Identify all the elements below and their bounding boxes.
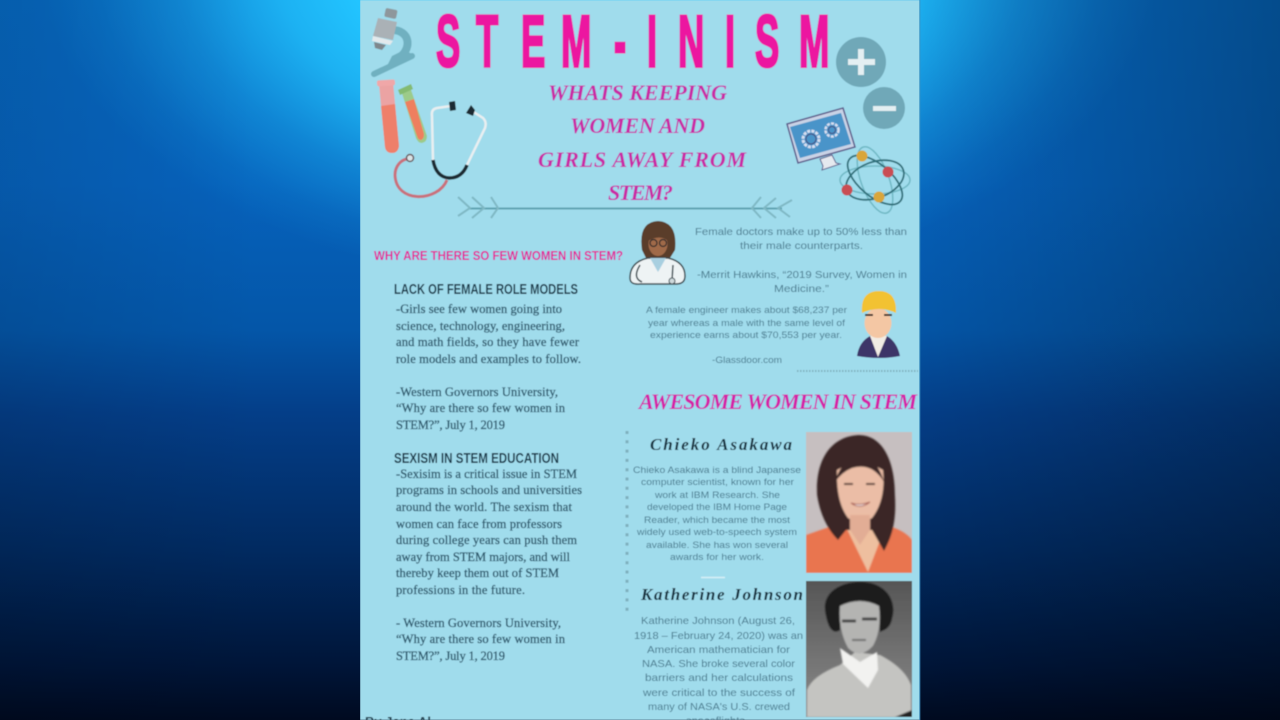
text: katherine bio: Katherine Johnson (August 26, [641,615,795,627]
text: katherine bio: NASA. She broke several color [642,658,796,670]
text: female doctors statistic: -Merrit Hawkins, “2019 Survey, Women in [697,269,907,281]
poster panel [360,0,920,720]
text: chieko bio: computer scientist, known for her [641,477,794,487]
text: chieko bio: Chieko Asakawa is a blind Japanese [633,465,801,475]
text: sexism body: STEM?”, July 1, 2019 [396,649,505,663]
subtitle: STEM? [608,180,673,205]
text: sexism body: -Sexisim is a critical issue in STEM [396,467,577,481]
text: sexism body: professions in the future. [396,583,525,597]
title: STEM-INISM [436,2,829,83]
text: sexism body: women can face from professors [396,517,562,531]
heading: sexism in stem education: SEXISM IN STEM EDUCATION [394,451,559,467]
text: katherine bio: barriers and her calculations [645,672,793,684]
text: role models body: science, technology, engineering, [396,319,565,333]
text: chieko bio: work at IBM Research. She [654,490,780,500]
text: sexism body: thereby keep them out of STEM [396,566,559,580]
text: katherine bio: many of NASA's U.S. crewed [648,701,790,713]
text: female doctors statistic [695,226,907,295]
text: role models body: -Girls see few women going into [396,302,562,316]
left column: sexism in stem education [394,451,582,663]
photo: chieko asakawa [806,432,912,573]
text: chieko bio: available. She has won several [646,540,788,550]
subtitle: WHATS KEEPING [548,80,727,105]
text: katherine bio [634,615,803,720]
text: role models body: “Why are there so few women in [396,401,566,415]
icon: plus circle [836,37,886,87]
text: female doctors statistic: their male counterparts. [740,240,863,252]
text: sexism body: programs in schools and universities [396,483,582,497]
profile: chieko asakawa [633,432,912,573]
text: role models body: STEM?”, July 1, 2019 [396,418,505,432]
text: sexism body: around the world. The sexism that [396,500,573,514]
white divider [701,576,725,578]
text: role models body: and math fields, so they have fewer [396,335,580,349]
text: female engineer statistic: year whereas a male with the same level of [648,318,845,329]
icon: atom [839,142,911,218]
icon: monitor with gears [787,108,855,170]
text: sexism body: away from STEM majors, and will [396,550,571,564]
text: female engineer statistic: A female engineer makes about $68,237 per [646,305,847,316]
text: chieko bio: awards for her work. [670,552,764,562]
arrow divider [458,197,792,218]
poster [360,0,920,720]
text: chieko bio: widely used web-to-speech system [636,527,797,537]
poster right edge [919,0,920,720]
dotted column [626,431,628,617]
text: chieko bio [633,465,801,562]
icon: minus circle [863,87,905,129]
icon: microscope [372,8,414,74]
icon: female doctor [630,221,685,284]
photo: katherine johnson [806,581,912,717]
subtitle: GIRLS AWAY FROM [538,147,747,172]
text: female engineer statistic [646,305,847,366]
subtitle [538,80,747,205]
text: katherine bio: were critical to the success of [642,687,795,699]
text: role models body [396,302,581,432]
text: chieko bio: Reader, which became the most [644,515,791,525]
text: role models body: role models and examples to follow. [396,352,581,366]
name: chieko asakawa: Chieko Asakawa [650,435,792,454]
icon: engineer [857,291,900,358]
heading: why so few women: WHY ARE THERE SO FEW WOMEN IN STEM? [374,249,623,263]
text: female doctors statistic: Female doctors make up to 50% less than [695,226,907,238]
text: chieko bio: developed the IBM Home Page [647,502,787,512]
heading: awesome women in stem: AWESOME WOMEN IN STEM [637,389,918,414]
subtitle: WOMEN AND [570,113,705,138]
text: sexism body: - Western Governors University, [396,616,561,630]
text: female engineer statistic: -Glassdoor.com [712,355,782,366]
text: katherine bio: 1918 – February 24, 2020) was an [634,630,803,642]
profile: katherine johnson [634,581,912,720]
icon: stethoscope [395,101,486,197]
dotted divider [797,370,918,372]
text: female engineer statistic: experience earns about $70,553 per year. [650,330,842,341]
left column: lack of female role models [394,282,581,432]
text: sexism body: “Why are there so few women in [396,632,566,646]
text: katherine bio: American mathematician for [647,644,791,656]
name: katherine johnson: Katherine Johnson [640,585,803,604]
text: sexism body [396,467,582,663]
text: role models body: -Western Governors University, [396,385,558,399]
icon: test tubes [377,79,427,153]
text: female doctors statistic: Medicine.” [774,283,830,295]
text: sexism body: during college years can push them [396,533,577,547]
heading: lack of female role models: LACK OF FEMALE ROLE MODELS [394,282,578,298]
